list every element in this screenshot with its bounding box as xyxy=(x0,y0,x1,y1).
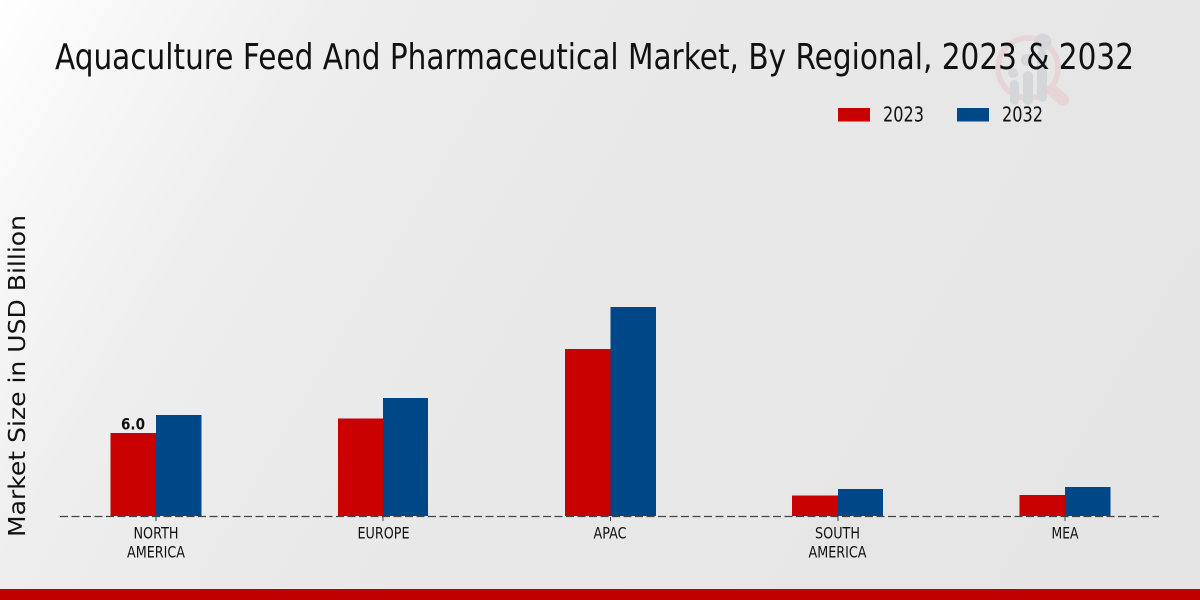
x-axis label: North America: NORTH xyxy=(134,524,178,542)
legend item: 2023 xyxy=(838,102,924,126)
x-axis label: South America: AMERICA xyxy=(808,542,867,562)
legend xyxy=(838,102,1043,126)
x-axis label: North America xyxy=(127,524,185,562)
bars: MEA xyxy=(1020,487,1110,516)
icon: watermark logo xyxy=(998,34,1063,105)
bars: Europe xyxy=(338,398,428,516)
x-axis label: MEA: MEA xyxy=(1052,524,1079,542)
value label: 6.0: 6.0 xyxy=(121,414,145,434)
footer bar xyxy=(0,589,1200,600)
y-axis title: Market Size in USD Billion xyxy=(3,215,31,537)
x-axis label: North America: AMERICA xyxy=(127,542,185,562)
x-axis baseline xyxy=(60,516,1159,521)
legend item: 2023: 2023 xyxy=(883,102,924,126)
x-axis label: South America xyxy=(808,524,867,562)
bar chart xyxy=(60,307,1159,562)
x-axis label: Europe: EUROPE xyxy=(358,524,410,542)
bars: North America xyxy=(110,415,202,516)
bars: South America xyxy=(792,489,883,516)
x-axis label: APAC: APAC xyxy=(594,524,626,542)
bars: APAC xyxy=(565,307,656,516)
legend item: 2032: 2032 xyxy=(1002,102,1043,126)
legend item: 2032 xyxy=(957,102,1043,126)
x-axis label: South America: SOUTH xyxy=(815,524,860,542)
